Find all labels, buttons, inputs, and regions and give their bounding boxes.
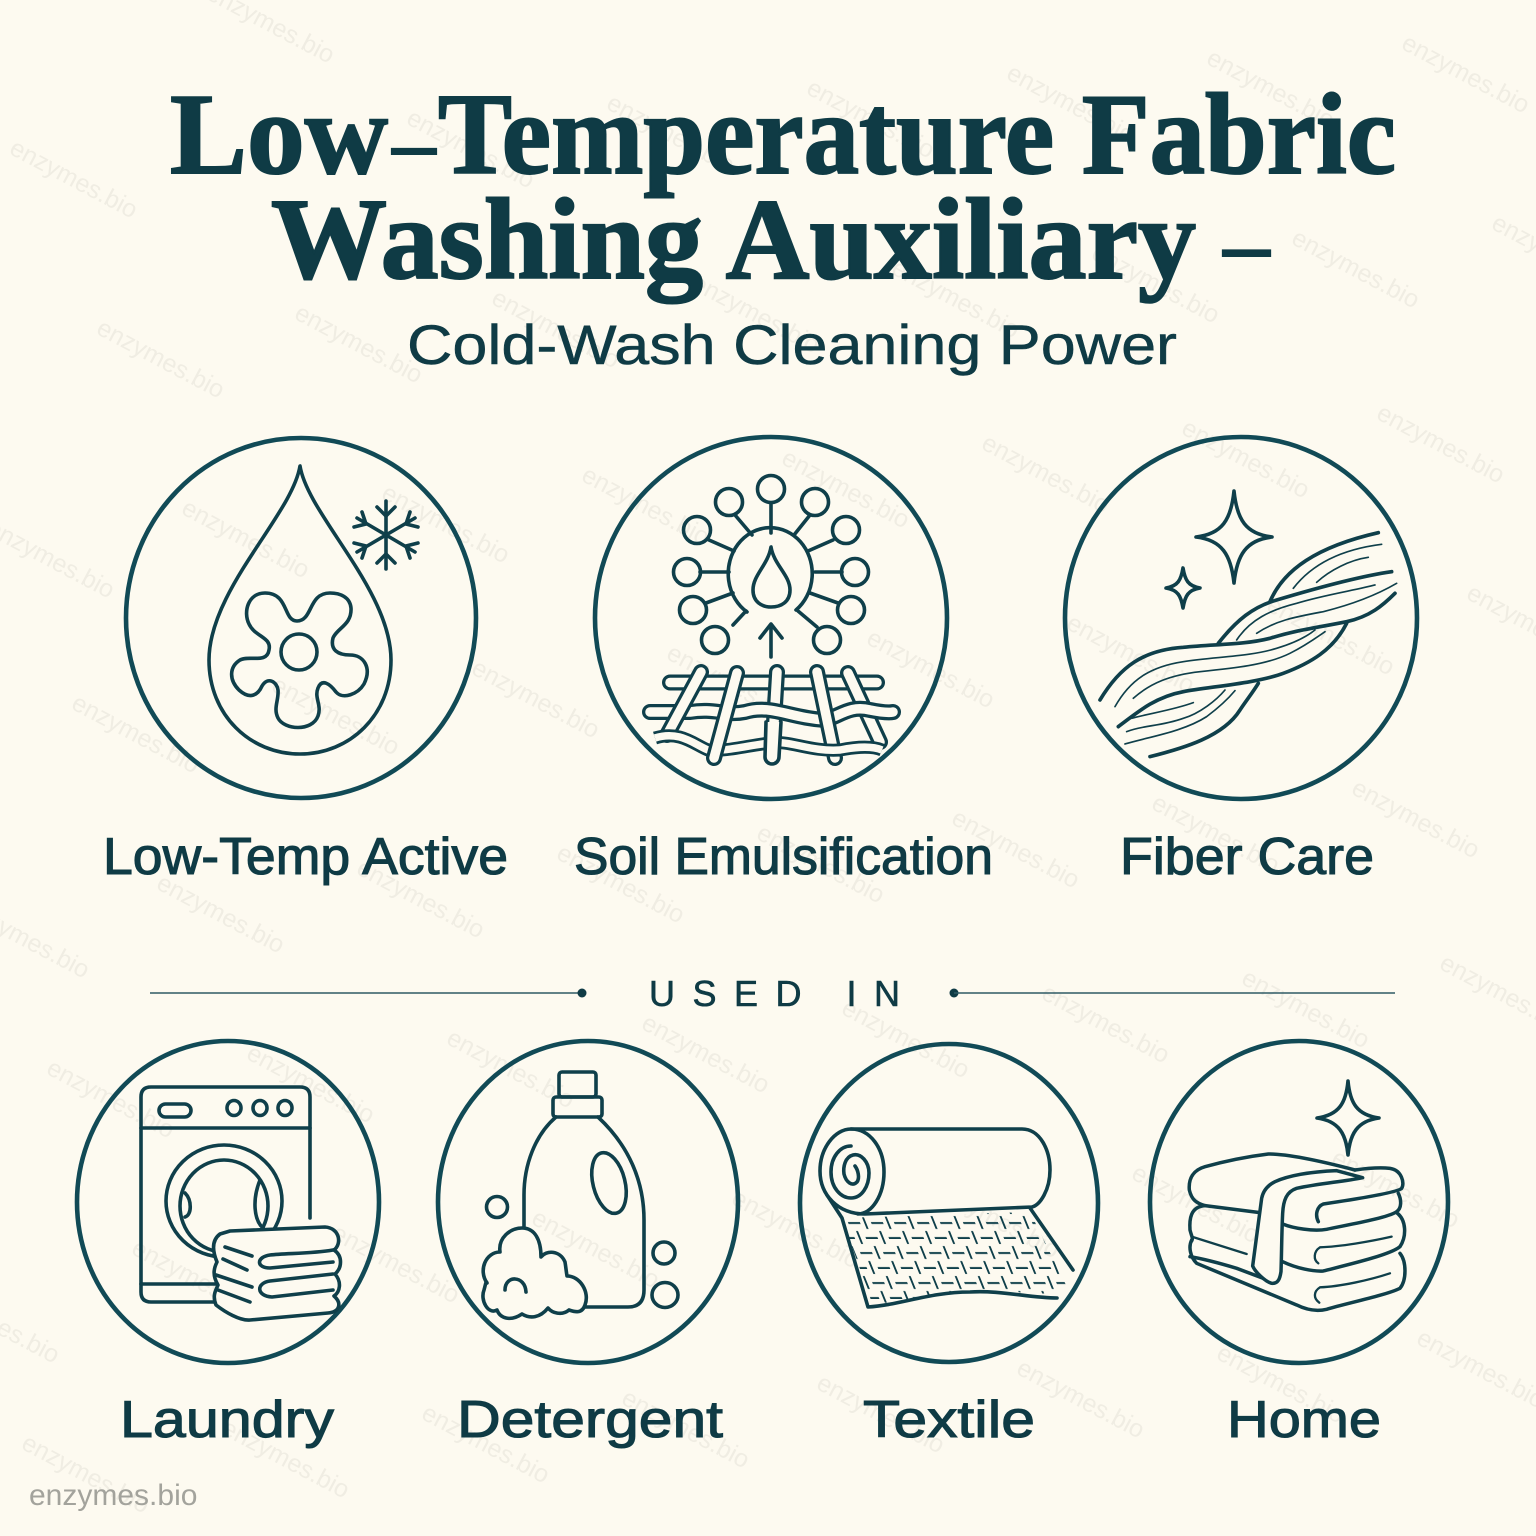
watermark pattern: enzymes.bio xyxy=(752,819,889,909)
watermark pattern: enzymes.bio xyxy=(727,1184,864,1274)
watermark pattern: enzymes.bio xyxy=(802,74,939,164)
watermark pattern: enzymes.bio xyxy=(1147,789,1284,879)
watermark pattern: enzymes.bio xyxy=(617,1384,754,1474)
circle frame xyxy=(126,438,476,798)
icon: folded towels xyxy=(214,1227,340,1320)
arrow: upward lift xyxy=(760,624,782,657)
watermark pattern: enzymes.bio xyxy=(1202,44,1339,134)
watermark pattern: enzymes.bio xyxy=(947,804,1084,894)
title line 2: Washing Auxiliary xyxy=(271,176,1196,304)
panel: detergent xyxy=(438,1041,738,1363)
icon: woven fabric sheet xyxy=(827,1195,1073,1307)
title xyxy=(170,71,1396,376)
watermark pattern: enzymes.bio xyxy=(92,314,229,404)
icon: sparkle xyxy=(1317,1081,1379,1155)
title line 1: Low xyxy=(170,71,388,199)
icon: woven fabric xyxy=(650,672,893,764)
panel: soil emulsification xyxy=(595,437,947,799)
watermark pattern: enzymes.bio xyxy=(1127,1159,1264,1249)
watermark pattern: enzymes.bio xyxy=(327,1219,464,1309)
watermark pattern: enzymes.bio xyxy=(42,1054,179,1144)
watermark pattern: enzymes.bio xyxy=(1087,239,1224,329)
title line 2: – xyxy=(1222,192,1271,296)
watermark pattern: enzymes.bio xyxy=(812,1369,949,1459)
circle frame xyxy=(800,1044,1098,1362)
title line 1: Temperature Fabric xyxy=(438,71,1396,199)
panel: low-temp active xyxy=(126,438,476,798)
watermark pattern: enzymes.bio xyxy=(527,1204,664,1294)
watermark pattern: enzymes.bio xyxy=(417,1399,554,1489)
watermark pattern: enzymes.bio xyxy=(67,689,204,779)
watermark pattern: enzymes.bio xyxy=(1372,399,1509,489)
icon: suds and bubbles xyxy=(483,1196,678,1318)
icon: water drop with enzyme xyxy=(209,466,391,754)
watermark pattern: enzymes.bio xyxy=(637,1009,774,1099)
watermark pattern: enzymes.bio xyxy=(1237,964,1374,1054)
circle frame xyxy=(438,1041,738,1363)
panel: home xyxy=(1150,1041,1448,1363)
watermark pattern: enzymes.bio xyxy=(1177,414,1314,504)
watermark pattern: enzymes.bio xyxy=(1037,979,1174,1069)
label: low-temp active: Low-Temp Active xyxy=(103,828,508,886)
label: detergent: Detergent xyxy=(457,1391,724,1449)
panel: laundry xyxy=(77,1041,379,1363)
watermark pattern: enzymes.bio xyxy=(977,429,1114,519)
watermark pattern: enzymes.bio xyxy=(662,639,799,729)
circle frame xyxy=(1065,437,1417,799)
watermark pattern: enzymes.bio xyxy=(352,854,489,944)
watermark pattern: enzymes.bio xyxy=(402,104,539,194)
circle frame xyxy=(595,437,947,799)
watermark pattern: enzymes.bio xyxy=(1262,591,1399,681)
watermark pattern: enzymes.bio xyxy=(862,624,999,714)
watermark pattern: enzymes.bio xyxy=(1287,224,1424,314)
watermark pattern: enzymes.bio xyxy=(467,654,604,744)
subtitle: Cold-Wash Cleaning Power xyxy=(407,313,1177,376)
circle frame xyxy=(77,1041,379,1363)
watermark pattern: enzymes.bio xyxy=(442,1024,579,1114)
watermark pattern: enzymes.bio xyxy=(1212,1339,1349,1429)
label: fiber care: Fiber Care xyxy=(1120,828,1374,886)
watermark pattern: enzymes.bio xyxy=(177,494,314,584)
label: laundry: Laundry xyxy=(120,1391,334,1449)
icon: twisted fibers xyxy=(1100,533,1397,757)
watermark pattern: enzymes.bio xyxy=(217,1414,354,1504)
watermark pattern: enzymes.bio xyxy=(1012,1354,1149,1444)
icon: micelle around oil droplet xyxy=(674,476,868,654)
icon: folded towel stack xyxy=(1189,1154,1405,1310)
heading: used in: USED IN xyxy=(649,973,900,1014)
watermark pattern: enzymes.bio xyxy=(887,254,1024,344)
watermark pattern: enzymes.bio xyxy=(152,869,289,959)
label: soil emulsification: Soil Emulsification xyxy=(574,828,993,886)
watermark pattern: enzymes.bio xyxy=(1002,59,1139,149)
watermark pattern: enzymes.bio xyxy=(267,671,404,761)
footer watermark: enzymes.bio xyxy=(29,1479,197,1512)
panel: textile xyxy=(800,1044,1098,1362)
label: home: Home xyxy=(1227,1391,1381,1449)
watermark pattern: enzymes.bio xyxy=(927,1174,1064,1264)
watermark pattern: enzymes.bio xyxy=(5,134,142,224)
watermark pattern: enzymes.bio xyxy=(487,284,624,374)
watermark pattern: enzymes.bio xyxy=(1347,774,1484,864)
icon: fabric roll xyxy=(820,1129,1050,1214)
watermark pattern: enzymes.bio xyxy=(1062,609,1199,699)
watermark pattern: enzymes.bio xyxy=(1327,1144,1464,1234)
watermark pattern: enzymes.bio xyxy=(1397,29,1534,119)
watermark pattern: enzymes.bio xyxy=(837,994,974,1084)
label: textile: Textile xyxy=(863,1391,1035,1449)
divider: used in xyxy=(150,973,1395,1014)
watermark pattern: enzymes.bio xyxy=(17,1429,154,1519)
circle frame xyxy=(1150,1041,1448,1363)
icon: detergent bottle xyxy=(524,1072,644,1307)
watermark pattern: enzymes.bio xyxy=(687,269,824,359)
watermark pattern: enzymes.bio xyxy=(242,1039,379,1129)
watermark pattern: enzymes.bio xyxy=(577,461,714,551)
watermark pattern: enzymes.bio xyxy=(777,444,914,534)
watermark pattern: enzymes.bio xyxy=(602,89,739,179)
icon: sparkles xyxy=(1166,491,1272,608)
watermark pattern: enzymes.bio xyxy=(552,839,689,929)
icon: snowflake xyxy=(354,501,418,569)
icon: washing machine xyxy=(141,1087,310,1302)
watermark pattern: enzymes.bio xyxy=(290,299,427,389)
watermark pattern: enzymes.bio xyxy=(127,1234,264,1324)
panel: fiber care xyxy=(1065,437,1417,799)
title line 1: – xyxy=(391,95,437,192)
watermark pattern: enzymes.bio xyxy=(377,479,514,569)
